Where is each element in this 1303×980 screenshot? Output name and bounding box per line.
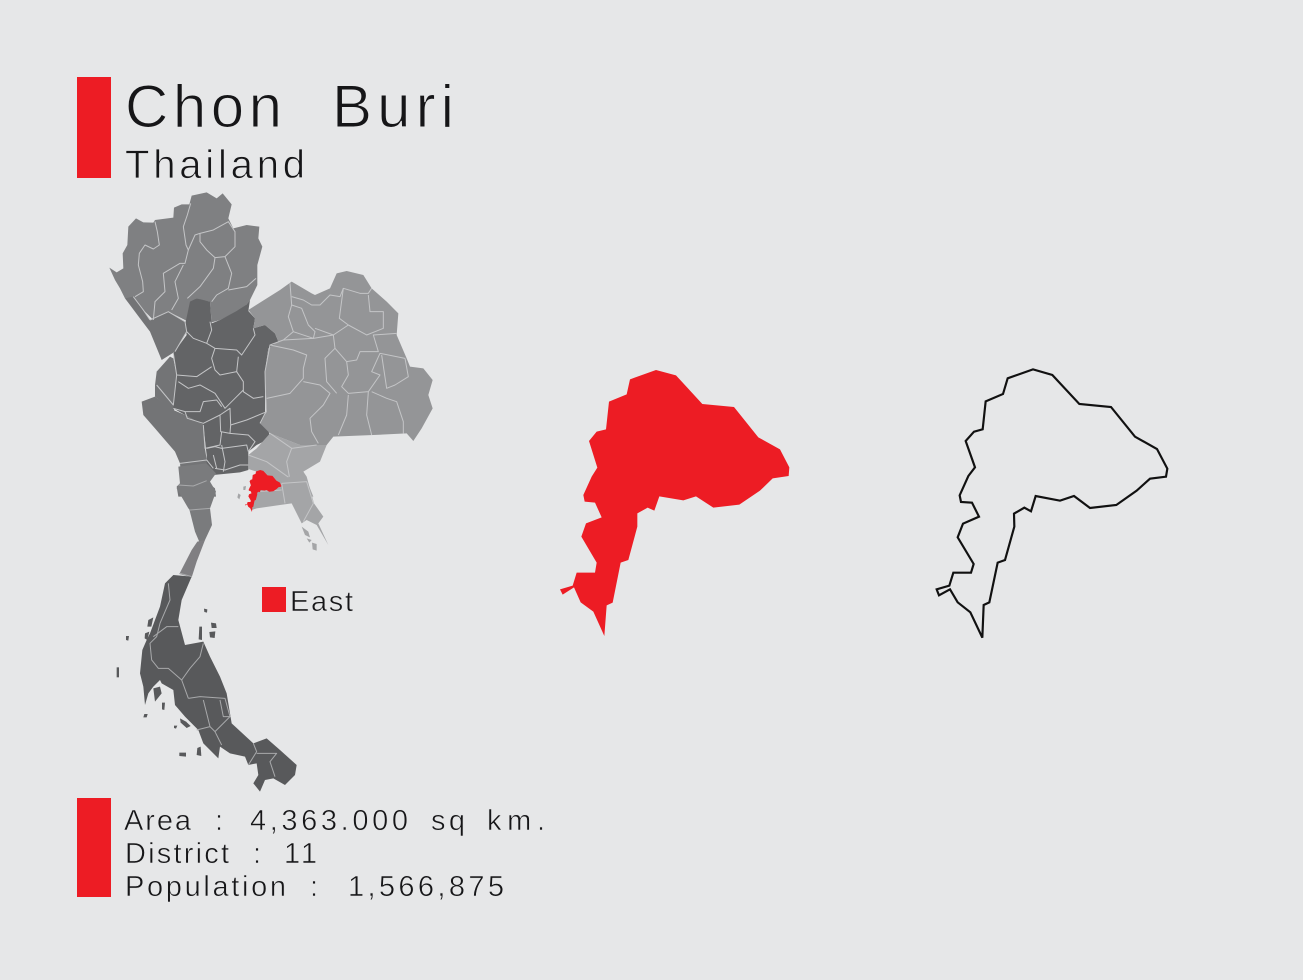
stat: population: : [310, 871, 318, 903]
province boundary lines [133, 203, 408, 482]
east region boundary lines [257, 482, 313, 522]
title block [77, 73, 454, 187]
stat: population: Population [125, 871, 286, 903]
statistics accent bar [77, 798, 111, 897]
region: south [140, 575, 297, 792]
stat: area: sq [431, 805, 465, 837]
statistics block [77, 798, 545, 903]
title: Chon Buri: Buri [332, 73, 454, 140]
Chon Buri outline shape [937, 369, 1167, 638]
stat: district: District [125, 838, 229, 870]
region: northeast [248, 271, 433, 445]
map: northern and central Thailand regions [109, 192, 433, 497]
stat: area: 4,363.000 [250, 805, 408, 837]
title accent bar [77, 77, 111, 178]
eastern islands [237, 486, 317, 551]
southern islands [117, 609, 217, 757]
legend label: East [290, 586, 353, 618]
Chon Buri filled red shape [560, 370, 789, 636]
region: central [173, 298, 278, 480]
region: east upper [248, 433, 327, 497]
subtitle: Thailand: Thailand [125, 143, 305, 187]
Thailand regional map [109, 192, 433, 792]
Chon Buri highlighted on national map [245, 470, 281, 512]
region: west [125, 297, 216, 497]
stat: area: km. [487, 805, 545, 837]
region: southeast coast [252, 472, 328, 545]
title: Chon Buri: Chon [125, 73, 282, 140]
province boundary lines [150, 481, 277, 777]
stat: area: : [215, 805, 223, 837]
stat: district: 11 [284, 838, 317, 870]
map: southern Thailand and gulf regions [117, 463, 328, 792]
region: north [109, 192, 262, 322]
region: west gulf coast [177, 463, 216, 577]
legend swatch [262, 587, 286, 612]
stat: district: : [253, 838, 261, 870]
stat: population: 1,566,875 [348, 871, 504, 903]
legend: East [262, 586, 353, 618]
stat: area: Area [124, 805, 192, 837]
